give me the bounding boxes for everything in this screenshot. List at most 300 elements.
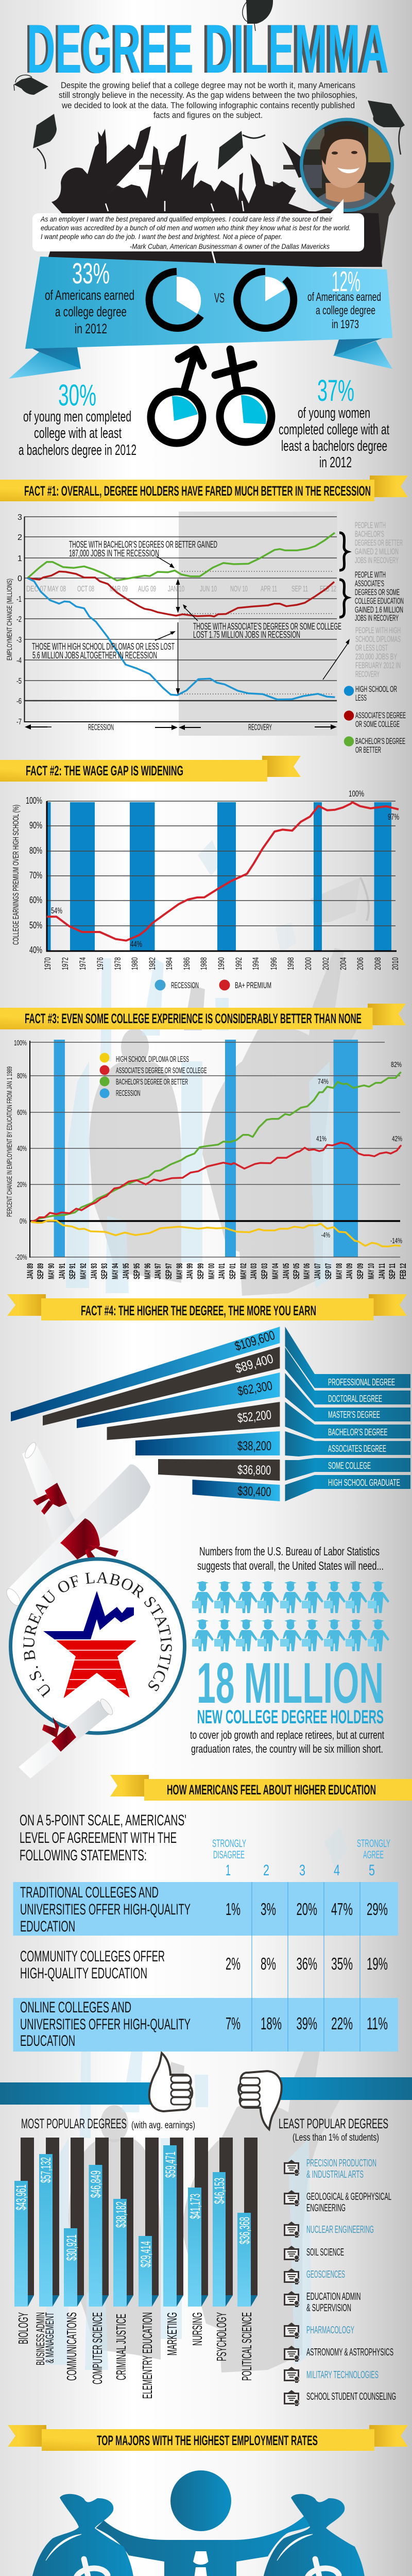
stat: 12% in 1973: in 1973 — [332, 317, 359, 331]
x labels: 1972 — [60, 957, 70, 970]
x labels: SEP 09 — [355, 1263, 365, 1279]
x labels: MAY 98 — [175, 1263, 184, 1279]
x labels: 1990 — [216, 957, 226, 970]
heading ribbon: top majors — [8, 2425, 408, 2451]
data labels: 100% — [349, 789, 364, 799]
data labels: 42% — [392, 1134, 402, 1143]
x labels: JAN 03 — [249, 1263, 259, 1279]
x labels: 1980 — [130, 957, 140, 970]
bar values — [13, 2151, 252, 2267]
x labels: MAY 08 — [334, 1263, 344, 1279]
earnings bars — [11, 1327, 280, 1501]
seal: U.S. Bureau of Labor Statistics: U.S. BUREAU OF LABOR STATISTICS — [23, 1572, 172, 1698]
bar values: $57,132 — [38, 2157, 54, 2183]
x axis labels: NOV 10 — [230, 585, 248, 594]
x axis labels: OCT 08 — [77, 585, 94, 594]
background ghost crowd: facts 2 and 3 — [66, 948, 360, 1296]
label: vs: VS — [214, 290, 225, 306]
data labels: -14% — [390, 1236, 402, 1245]
man — [96, 2470, 311, 2576]
chart: employment by education since 1989 — [5, 1039, 408, 1279]
fold triangles — [28, 2295, 258, 2307]
row: online — [20, 1999, 388, 2049]
x labels: 2002 — [321, 957, 331, 970]
stat: 12% in 1973 — [307, 265, 381, 331]
legend: chart 1 — [344, 684, 406, 755]
item: education admin: & SUPERVISION — [306, 2302, 351, 2314]
chart: employment change in recession and recovery — [5, 512, 350, 736]
stat: young men: a bachelors degree in 2012 — [19, 442, 136, 459]
degree folds — [285, 1327, 315, 1501]
x labels: 2000 — [303, 957, 313, 970]
heading ribbon: fact 1 — [0, 476, 408, 501]
y axis title: EMPLOYMENT CHANGE (MILLIONS) — [5, 579, 13, 660]
row: traditional: 1% — [226, 1900, 241, 1919]
data labels: 41% — [316, 1134, 327, 1143]
chart: most popular degrees with earnings — [13, 2138, 258, 2399]
blue band: most popular — [0, 2082, 152, 2105]
legend: chart 2: RECESSION — [171, 980, 199, 990]
stat: 12% in 1973: 12% — [332, 265, 360, 297]
x labels: JAN 91 — [57, 1263, 67, 1279]
bar labels: NURSING — [190, 2312, 205, 2346]
bar values: $46,153 — [212, 2178, 227, 2204]
bar labels: POLITICAL SCIENCE — [239, 2312, 254, 2381]
side notes: jobs gained in recovery — [339, 520, 404, 679]
intro paragraph: Despite the growing belief that a college degree may not be worth it, many Americans — [61, 80, 355, 90]
row: traditional: EDUCATION — [20, 1918, 75, 1935]
x axis labels: AUG 09 — [138, 585, 156, 594]
earnings values: $38,200 — [237, 1439, 271, 1453]
y axis title: COLLEGE EARNINGS PREMIUM OVER HIGH SCHOOL (%) — [12, 805, 21, 945]
earnings values — [233, 1328, 277, 1499]
x axis labels: FEB 12 — [320, 585, 336, 594]
intro paragraph: we decided to look at the data. The following infographic contains recently published — [61, 100, 355, 110]
scale header: 5 — [369, 1862, 375, 1879]
recession bars — [47, 802, 391, 951]
x labels: SEP 89 — [36, 1263, 45, 1279]
y axis labels — [16, 513, 22, 726]
x labels: SEP 97 — [164, 1263, 174, 1279]
dark bar backs — [21, 2138, 258, 2295]
x labels: SEP 11 — [387, 1263, 397, 1279]
recession bars — [54, 1040, 358, 1257]
x labels: 1996 — [269, 957, 279, 970]
table lead-in: LEVEL OF AGREEMENT WITH THE — [20, 1829, 177, 1846]
row: online: 7% — [226, 2014, 241, 2033]
heading: most popular degrees: (with avg. earnings) — [131, 2120, 195, 2131]
item: pharmacology: PHARMACOLOGY — [306, 2325, 354, 2336]
row: traditional: UNIVERSITIES OFFER HIGH-QUALITY — [20, 1901, 191, 1918]
icon: diploma scroll in front of seal — [19, 1697, 115, 1778]
x labels: SEP 99 — [196, 1263, 205, 1279]
row: traditional: TRADITIONAL COLLEGES AND — [20, 1884, 159, 1901]
x labels: MAY 90 — [46, 1263, 56, 1279]
annotation: high school: THOSE WITH HIGH SCHOOL DIPLOMAS OR LESS LOST — [32, 641, 175, 652]
text: bureau numbers — [197, 1545, 384, 1572]
annotation: associate's: LOST 1.75 MILLION JOBS IN RECESSION — [193, 630, 300, 640]
y labels: 50% — [29, 920, 42, 930]
stat: young women: in 2012 — [319, 454, 352, 471]
heading: most popular degrees: MOST POPULAR DEGREES — [21, 2116, 127, 2131]
row: community: HIGH-QUALITY EDUCATION — [20, 1965, 147, 1982]
x labels: MAY 96 — [143, 1263, 152, 1279]
stat: young men: 30% — [58, 379, 96, 412]
heading ribbon: how Americans feel — [110, 1775, 412, 1801]
money bag left — [29, 2494, 135, 2576]
x axis labels: APR 11 — [261, 585, 277, 594]
banner: share of Americans with a degree — [9, 257, 392, 379]
x labels: 1994 — [251, 957, 261, 970]
earnings values: $62,300 — [236, 1379, 273, 1399]
x labels: 1970 — [43, 957, 53, 970]
x labels: MAY 10 — [366, 1263, 376, 1279]
scale header: 1 — [226, 1862, 231, 1879]
stat: 33% in 2012: a college degree — [55, 304, 127, 319]
y axis labels: 3 — [18, 513, 22, 522]
x labels: 1976 — [95, 957, 105, 970]
icon: thumb down — [238, 2071, 282, 2129]
y labels: 40% — [17, 1144, 27, 1153]
line: BA+ premium — [47, 802, 399, 941]
list: least popular degrees — [284, 2158, 396, 2406]
bar labels: BUSINESS ADMIN — [34, 2312, 47, 2365]
legend: chart 2: BA+ PREMIUM — [235, 980, 271, 990]
annotation arrows — [26, 556, 350, 727]
callout: Mark Cuban quote: I want people who can do the job. I want the best and brightest. Not a piece of paper. — [41, 232, 282, 241]
bar labels: PSYCHOLOGY — [214, 2312, 229, 2361]
recession and recovery markers — [25, 722, 337, 732]
side notes: jobs gained in recovery: RECOVERY — [355, 669, 380, 679]
icon: man holding money bags — [29, 2470, 367, 2576]
legend: HIGH SCHOOL DIPLOMA OR LESS — [116, 1055, 189, 1064]
degree labels: SOME COLLEGE — [328, 1461, 371, 1471]
y axis title: PERCENT CHANGE IN EMPLOYMENT BY EDUCATION FROM JAN 1 1989 — [5, 1066, 13, 1217]
row: community: COMMUNITY COLLEGES OFFER — [20, 1948, 165, 1965]
row: community: 8% — [261, 1954, 276, 1973]
stat: 33% in 2012 — [45, 257, 134, 336]
x labels — [25, 1263, 408, 1279]
row: traditional: 47% — [331, 1900, 353, 1919]
annotation: bachelor's: THOSE WITH BACHELOR'S DEGREES OR BETTER GAINED — [69, 539, 217, 550]
x labels: 2006 — [355, 957, 365, 970]
scale header — [212, 1838, 390, 1879]
x labels: JAN 95 — [121, 1263, 131, 1279]
x labels: 1998 — [286, 957, 296, 970]
x labels: SEP 05 — [291, 1263, 301, 1279]
background ghost crowd: degrees section — [45, 2025, 340, 2372]
table lead-in — [20, 1812, 186, 1864]
row: online: 22% — [331, 2014, 353, 2033]
x labels: SEP 01 — [228, 1263, 237, 1279]
y axis labels: -4 — [16, 656, 22, 665]
x labels: 2004 — [338, 957, 348, 970]
line: high school diploma or less — [31, 1221, 401, 1246]
x axis labels: SEP 11 — [291, 585, 308, 594]
earnings values: $52,200 — [237, 1408, 272, 1426]
x labels: 2010 — [390, 957, 400, 970]
bar labels — [15, 2312, 254, 2399]
row: traditional: 20% — [297, 1900, 317, 1919]
pie: 12% — [237, 272, 294, 328]
item: geosciences: GEOSCIENCES — [306, 2269, 345, 2280]
line: bachelor's degree or better — [31, 1072, 401, 1222]
x axis labels: JUN 10 — [200, 585, 217, 594]
x labels: 1986 — [182, 957, 192, 970]
y labels: 100% — [14, 1039, 27, 1047]
line: associate's degree or some college — [31, 1143, 401, 1222]
annotation: bachelor's: 187,000 JOBS IN THE RECESSION — [69, 548, 159, 558]
x axis labels: MAY 08 — [47, 585, 66, 594]
legend: chart 1: OR BETTER — [355, 745, 381, 755]
stat: young women — [279, 374, 389, 471]
callout: Mark Cuban quote: -Mark Cuban, American Businessman & owner of the Dallas Mavericks — [130, 242, 330, 250]
x labels: JAN 01 — [217, 1263, 227, 1279]
y labels: 60% — [17, 1108, 27, 1117]
row: online: EDUCATION — [20, 2032, 75, 2049]
scale header: 3 — [299, 1862, 305, 1879]
item: soil science: SOIL SCIENCE — [306, 2247, 344, 2258]
star: blue chart line — [43, 1591, 134, 1639]
row: online: 39% — [297, 2014, 317, 2033]
legend — [100, 1053, 207, 1098]
x labels: SEP 93 — [99, 1263, 109, 1279]
scale header: 2 — [263, 1862, 269, 1879]
x labels: MAY 00 — [207, 1263, 216, 1279]
x labels: JAN 99 — [185, 1263, 195, 1279]
data labels: -4% — [321, 1231, 330, 1240]
table: agreement with statements — [13, 1812, 398, 2052]
y labels — [26, 795, 42, 955]
bar labels: ELEMENTRY EDUCATION — [140, 2312, 155, 2399]
earnings values: $109,600 — [233, 1328, 277, 1354]
x axis labels — [26, 585, 336, 594]
bar labels: & MANAGEMENT — [43, 2312, 56, 2363]
annotation: high school — [32, 641, 175, 660]
y labels: 20% — [17, 1180, 27, 1189]
pie: 33% — [149, 272, 201, 328]
blue bars — [14, 2145, 251, 2307]
stat: young men: college with at least — [34, 425, 122, 442]
y axis labels: 2 — [18, 533, 22, 542]
big number: 18 million — [190, 1651, 384, 1755]
x labels: JAN 07 — [313, 1263, 322, 1279]
stat: 33% in 2012: in 2012 — [75, 321, 107, 336]
x axis labels: JAN 10 — [168, 585, 184, 594]
bar labels: COMPUTER SCIENCE — [90, 2312, 105, 2384]
intro paragraph — [59, 80, 357, 120]
bar values: $46,849 — [88, 2171, 104, 2198]
item: soil science — [284, 2246, 344, 2262]
portrait: Mark Cuban — [301, 120, 394, 212]
data labels — [51, 789, 399, 949]
y labels: 0% — [20, 1217, 27, 1226]
x labels: JAN 09 — [345, 1263, 354, 1279]
y labels: 100% — [26, 795, 42, 806]
stat: 33% in 2012: of Americans earned — [45, 287, 134, 303]
scale header: STRONGLY — [212, 1838, 246, 1850]
icon array: graduates — [192, 1581, 389, 1651]
item: nuclear engineering — [284, 2222, 374, 2238]
x labels: SEP 95 — [132, 1263, 142, 1279]
x labels: SEP 91 — [67, 1263, 77, 1279]
x labels: FEB 12 — [398, 1263, 408, 1279]
y labels: -20% — [15, 1253, 27, 1262]
recession and recovery markers: RECESSION — [88, 722, 114, 732]
bar labels: COMMUNICATIONS — [64, 2312, 79, 2381]
item: pharmacology — [284, 2323, 354, 2338]
y labels: 70% — [29, 870, 42, 880]
y labels: 40% — [29, 945, 42, 955]
y labels: 60% — [29, 895, 42, 905]
x labels: SEP 07 — [323, 1263, 333, 1279]
side notes: jobs gained in recovery: BACHELOR'S — [355, 529, 384, 539]
row: online: ONLINE COLLEGES AND — [20, 1999, 131, 2016]
intro paragraph: facts and figures on the subject. — [153, 110, 263, 120]
y axis labels: -3 — [16, 636, 22, 645]
icon: female symbol pie 37% — [215, 349, 271, 442]
row: online: 18% — [261, 2014, 282, 2033]
stat: young women: 37% — [317, 374, 354, 408]
bar labels: MARKETING — [164, 2312, 180, 2355]
bar values: $43,961 — [13, 2184, 29, 2210]
row: community: 36% — [297, 1954, 317, 1973]
y labels — [14, 1039, 27, 1262]
callout: Mark Cuban quote — [32, 199, 364, 251]
x labels: 1978 — [113, 957, 123, 970]
dotted guide lines — [182, 571, 333, 694]
star: red stripes — [56, 1640, 136, 1698]
heading ribbon: fact 2: FACT #2: THE WAGE GAP IS WIDENING — [26, 763, 183, 778]
x labels: JAN 89 — [25, 1263, 35, 1279]
x labels: 1984 — [164, 957, 174, 970]
chart: wage premium — [12, 789, 400, 970]
row: community — [20, 1948, 388, 1982]
y axis labels: -6 — [16, 697, 22, 706]
row: online: UNIVERSITIES OFFER HIGH-QUALITY — [20, 2016, 191, 2033]
x labels: JAN 11 — [377, 1263, 387, 1279]
blue band: least popular — [280, 2077, 412, 2100]
line: high school or less — [28, 578, 335, 700]
item: precision production: & INDUSTRIAL ARTS — [306, 2169, 364, 2180]
faint background caps — [198, 840, 369, 1868]
line: associate's degree or some college — [28, 571, 334, 617]
item: astronomy — [284, 2346, 393, 2362]
stat: young men — [19, 379, 136, 459]
x axis labels: DEC 07 — [26, 585, 46, 594]
item: geosciences — [284, 2268, 345, 2284]
x labels: JAN 97 — [153, 1263, 163, 1279]
intro paragraph: still strongly believe in the necessity. As the gap widens between the two philosophies, — [59, 90, 357, 100]
y axis labels: -1 — [16, 595, 22, 604]
y labels: 80% — [17, 1072, 27, 1080]
y axis labels: -7 — [16, 718, 22, 726]
scale header: AGREE — [363, 1849, 384, 1861]
callout: Mark Cuban quote: As an employer I want the best prepared and qualified employees. I could care less if the source of their — [40, 215, 333, 223]
item: education admin — [284, 2291, 360, 2314]
stat: young women: of young women — [298, 405, 370, 421]
row: community: 19% — [367, 1954, 388, 1973]
heading ribbon: fact 4 — [7, 1294, 407, 1320]
stat: 33% in 2012: 33% — [72, 257, 110, 290]
side notes: jobs gained in recovery: ASSOCIATE'S — [355, 579, 384, 588]
icon: thumb up — [149, 2053, 192, 2111]
row: online: 11% — [367, 2014, 388, 2033]
x labels: MAY 94 — [110, 1263, 120, 1279]
heading: least popular degrees — [279, 2116, 388, 2143]
y axis labels: 1 — [18, 554, 22, 563]
legend: chart 1: LESS — [355, 693, 367, 703]
stat: 12% in 1973: a college degree — [316, 303, 375, 317]
icon: flying graduation caps — [14, 0, 405, 170]
graduates crowd silhouette — [45, 126, 396, 267]
heading ribbon: fact 3 — [0, 1004, 406, 1029]
row: traditional: 3% — [261, 1900, 276, 1919]
legend: ASSOCIATE'S DEGREE OR SOME COLLEGE — [116, 1066, 207, 1075]
earnings values: $36,800 — [237, 1463, 271, 1478]
scale header: 4 — [334, 1862, 340, 1879]
y labels: 80% — [29, 845, 42, 856]
bar labels: CRIMINAL JUSTICE — [113, 2314, 129, 2380]
degree labels — [315, 1374, 410, 1489]
earnings values: $30,400 — [237, 1484, 271, 1499]
x labels: 1982 — [147, 957, 157, 970]
data labels: 44% — [130, 939, 142, 949]
row: traditional: 29% — [367, 1900, 388, 1919]
heading ribbon: fact 2 — [0, 756, 301, 782]
item: geological engineering — [284, 2190, 391, 2214]
row: traditional — [20, 1884, 388, 1935]
chart: earnings by degree — [11, 1327, 410, 1501]
x labels: JAN 93 — [89, 1263, 99, 1279]
table lead-in: ON A 5-POINT SCALE, AMERICANS' — [20, 1812, 186, 1829]
data labels: 97% — [388, 812, 399, 822]
y axis labels: -2 — [16, 615, 22, 624]
bar values: $59,471 — [163, 2151, 178, 2178]
item: precision production — [284, 2158, 376, 2180]
legend: BACHELOR'S DEGREE OR BETTER — [116, 1078, 188, 1087]
stat: young men: of young men completed — [23, 409, 131, 425]
earnings values: $89,400 — [234, 1351, 275, 1376]
x labels: MAY 06 — [302, 1263, 312, 1279]
data labels: 74% — [318, 1077, 329, 1086]
bar values: $38,182 — [113, 2201, 129, 2228]
table lead-in: FOLLOWING STATEMENTS: — [20, 1847, 147, 1864]
heading: least popular degrees: (Less than 1% of students) — [293, 2132, 379, 2143]
recession and recovery markers: RECOVERY — [248, 722, 272, 732]
bar labels: BIOLOGY — [15, 2312, 31, 2344]
x axis labels: MAR 09 — [110, 585, 128, 594]
x labels: 1974 — [78, 957, 88, 970]
x labels: 2008 — [373, 957, 383, 970]
x labels: 1988 — [199, 957, 209, 970]
row: community: 35% — [331, 1954, 353, 1973]
x labels — [43, 957, 400, 970]
item: geological engineering: ENGINEERING — [306, 2202, 346, 2214]
legend: RECESSION — [116, 1089, 140, 1098]
x labels: JAN 05 — [281, 1263, 291, 1279]
item: school student counseling — [284, 2390, 396, 2406]
item: education admin: EDUCATION ADMIN — [306, 2291, 360, 2302]
annotation: associate's — [193, 621, 341, 640]
y axis labels: -5 — [16, 677, 22, 686]
x labels: 1992 — [234, 957, 244, 970]
legend: chart 2 — [154, 980, 271, 990]
scale header: DISAGREE — [213, 1849, 245, 1861]
data labels: 54% — [51, 906, 62, 916]
x labels: MAY 04 — [270, 1263, 280, 1279]
icon: male symbol pie 30% — [151, 349, 203, 443]
